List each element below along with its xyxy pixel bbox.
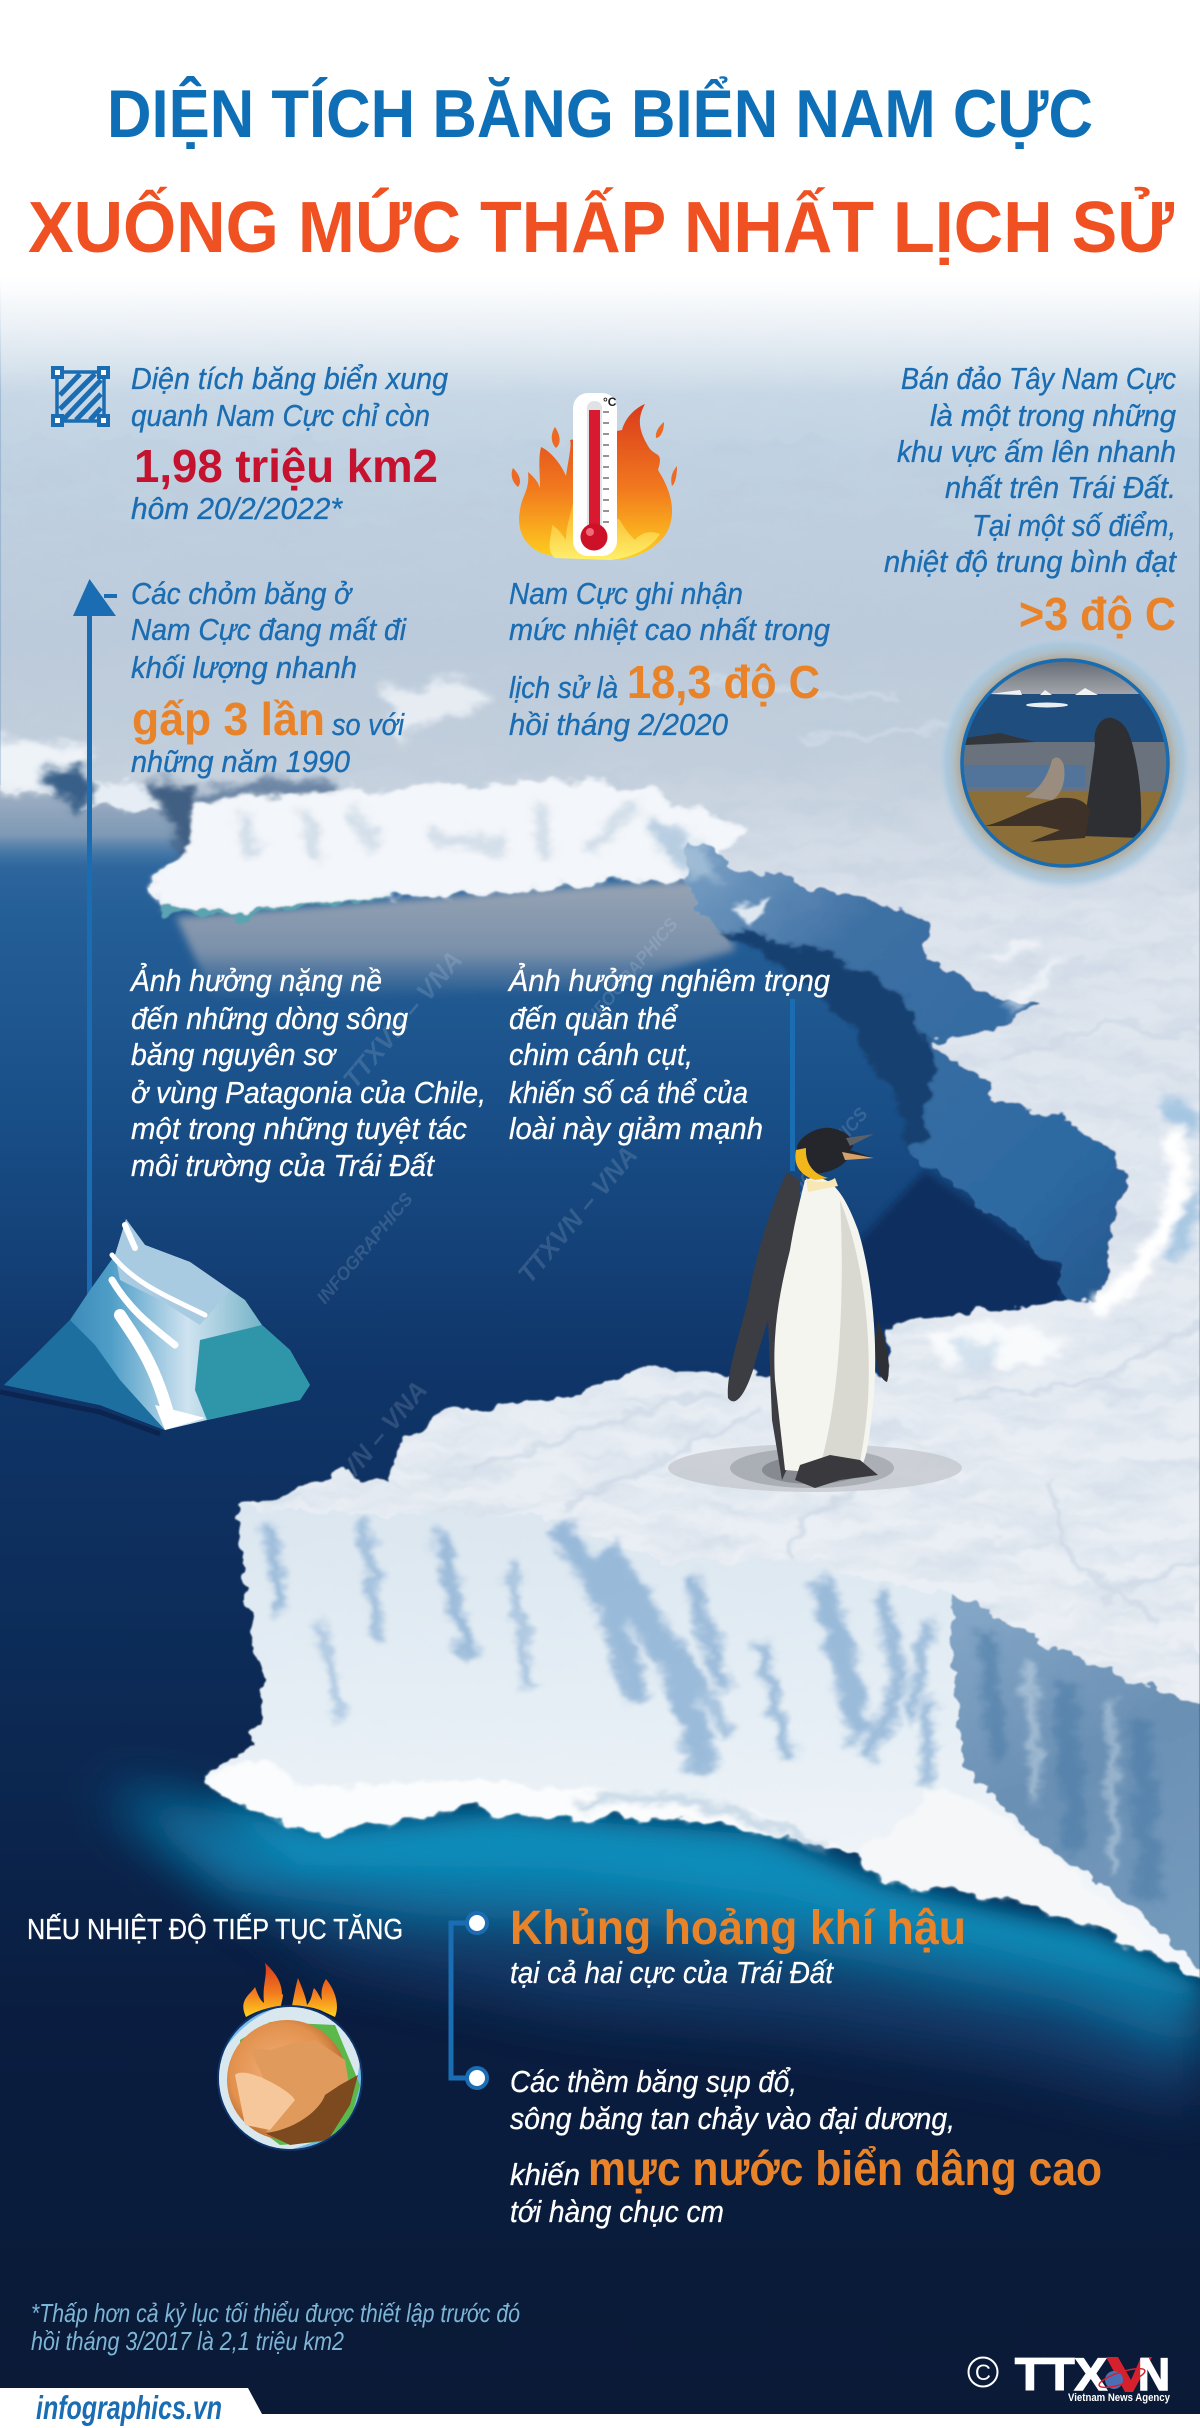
text block: ice caps losing mass: những năm 1990	[131, 744, 350, 779]
text block: record temperature: mức nhiệt cao nhất trong	[509, 612, 830, 647]
background: Antarctic sea and ice scene	[0, 281, 1200, 2145]
text block: Patagonia glaciers: băng nguyên sơ	[131, 1037, 337, 1072]
label: if temperature keeps rising: NẾU NHIỆT ĐỘ TIẾP TỤC TĂNG	[27, 1912, 403, 1946]
text block: record temperature: Nam Cực ghi nhận	[509, 576, 743, 611]
text block: sea level rise: tới hàng chục cm	[510, 2194, 724, 2229]
logo: TTXVN: N	[1138, 2349, 1170, 2400]
blue ice cliff along the shoreline	[684, 838, 1128, 1302]
text block: West Antarctic Peninsula	[884, 361, 1177, 640]
watermarks: INFOGRAPHICS	[768, 1104, 872, 1223]
text block: penguin populations	[507, 962, 830, 1146]
footnote	[31, 2298, 520, 2356]
icon: emperor penguin	[668, 1128, 962, 1492]
text block: West Antarctic Peninsula: Tại một số điểm,	[972, 508, 1176, 543]
watermarks: TTXVN – VNA	[512, 1140, 643, 1289]
watermarks: TTXVN – VNA	[302, 1375, 433, 1524]
text block: West Antarctic Peninsula: nhiệt độ trung bình đạt	[884, 544, 1177, 579]
ice surface cracks	[470, 680, 1200, 1620]
turquoise glow under the shelf	[100, 1790, 1200, 2110]
text block: ice caps losing mass: gấp 3 lần	[132, 693, 325, 745]
consequences bracket with dots	[451, 1913, 487, 2088]
logo: TTXVN: TTX	[1015, 2349, 1107, 2400]
text block: sea level rise: sông băng tan chảy vào đại dương,	[510, 2101, 955, 2136]
text block: record temperature	[509, 576, 830, 742]
connector line to penguin	[790, 999, 795, 1171]
watermarks	[302, 914, 872, 1524]
title	[28, 75, 1174, 268]
footer strip with site name: infographics.vn	[36, 2389, 222, 2426]
text block: West Antarctic Peninsula: là một trong những	[930, 398, 1176, 433]
text block: West Antarctic Peninsula: nhất trên Trái Đất.	[945, 470, 1176, 505]
icon: burning globe	[217, 1963, 363, 2160]
text block: penguin populations: chim cánh cụt,	[509, 1037, 693, 1072]
white streak on distant ice	[383, 680, 497, 745]
title: XUỐNG MỨC THẤP NHẤT LỊCH SỬ	[28, 186, 1174, 268]
icon: iceberg	[0, 1219, 310, 1434]
text block: Patagonia glaciers: đến những dòng sông	[131, 1001, 408, 1036]
text block: Patagonia glaciers: Ảnh hưởng nặng nề	[129, 962, 382, 998]
text block: sea ice area: quanh Nam Cực chỉ còn	[131, 398, 430, 433]
icon: hatched area square	[53, 368, 108, 425]
title: DIỆN TÍCH BĂNG BIỂN NAM CỰC	[107, 75, 1093, 152]
text block: ice caps losing mass: so với	[332, 707, 405, 742]
text block: penguin populations: khiến số cá thể của	[509, 1075, 748, 1110]
circular photo: fur seals	[937, 635, 1193, 891]
watermarks: INFOGRAPHICS	[313, 1189, 417, 1308]
icon: thermometer with flames	[512, 393, 677, 560]
text block: sea level rise: khiến	[510, 2157, 580, 2192]
footnote: hồi tháng 3/2017 là 2,1 triệu km2	[31, 2326, 344, 2356]
text block: sea level rise: mực nước biển dâng cao	[588, 2143, 1102, 2196]
text block: record temperature: lịch sử là	[509, 670, 618, 705]
logo: TTXVN	[968, 2349, 1171, 2404]
text block: sea ice area: hôm 20/2/2022*	[131, 491, 343, 526]
ice ridge patches on the right	[920, 940, 1200, 1370]
text block: Patagonia glaciers: ở vùng Patagonia của Chile,	[131, 1075, 486, 1110]
text block: climate crisis: Khủng hoảng khí hậu	[510, 1902, 966, 1955]
arrow: rising vertical line to iceberg	[73, 579, 117, 1322]
text block: ice caps losing mass: khối lượng nhanh	[131, 650, 357, 685]
text block: climate crisis	[510, 1902, 966, 1990]
text block: ice caps losing mass: Nam Cực đang mất đi	[131, 612, 407, 647]
text block: record temperature: 18,3 độ C	[627, 656, 820, 708]
text block: climate crisis: tại cả hai cực của Trái Đất	[510, 1955, 834, 1990]
text block: sea ice area: Diện tích băng biển xung	[131, 361, 448, 396]
text block: Patagonia glaciers: môi trường của Trái Đất	[131, 1148, 435, 1183]
text block: West Antarctic Peninsula: khu vực ấm lên nhanh	[897, 434, 1176, 469]
text block: sea level rise	[510, 2064, 1102, 2229]
logo: TTXVN: C	[975, 2360, 991, 2385]
text block: West Antarctic Peninsula: >3 độ C	[1019, 588, 1176, 640]
footnote: *Thấp hơn cả kỷ lục tối thiểu được thiết lập trước đó	[31, 2298, 520, 2328]
footer strip with site name	[0, 2388, 1200, 2428]
text block: penguin populations: đến quần thể	[509, 1001, 679, 1036]
logo: TTXVN: Vietnam News Agency	[1068, 2392, 1171, 2404]
text block: record temperature: hồi tháng 2/2020	[509, 707, 728, 742]
text block: sea ice area: 1,98 triệu km2	[134, 440, 438, 492]
text block: penguin populations: loài này giảm mạnh	[509, 1111, 763, 1146]
main ice shelf cliff	[204, 1510, 1200, 2000]
text block: Patagonia glaciers	[129, 962, 486, 1183]
far tabular iceberg	[151, 780, 745, 917]
small far iceberg	[0, 737, 330, 855]
text block: Patagonia glaciers: một trong những tuyệt tác	[131, 1111, 467, 1146]
text block: ice caps losing mass	[131, 576, 407, 779]
ice landmass	[0, 283, 1200, 1979]
text block: penguin populations: Ảnh hưởng nghiêm trọng	[507, 962, 830, 998]
top white fade	[0, 0, 1200, 395]
text block: ice caps losing mass: Các chỏm băng ở	[131, 576, 353, 611]
watermarks: TTXVN – VNA	[337, 945, 468, 1094]
icon: thermometer with flames: °C	[603, 395, 617, 409]
text block: sea ice area	[131, 361, 448, 526]
text block: sea level rise: Các thềm băng sụp đổ,	[510, 2064, 797, 2099]
watermarks: INFOGRAPHICS	[578, 914, 682, 1033]
